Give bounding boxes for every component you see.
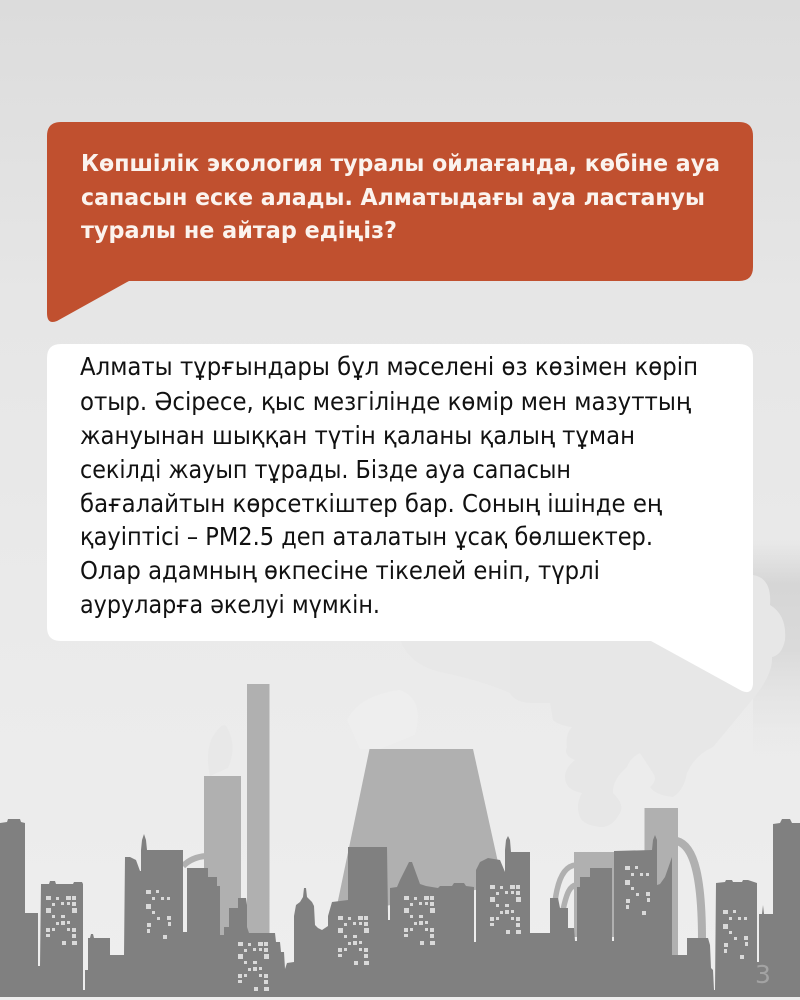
city skyline [0,819,800,997]
left tower [204,776,241,946]
question text: Көпшілік экология туралы ойлағанда, көбіне ауа [81,149,720,177]
cooling tower [335,749,503,915]
answer text: Алматы тұрғындары бұл мәселені өз көзімен көріп [80,352,698,381]
answer text: қауіптісі – РМ2.5 деп аталатын ұсақ бөлшектер. [80,522,653,551]
pipes [183,841,702,940]
answer text: секілді жауып тұрады. Бізде ауа сапасын [80,455,571,484]
tall chimney [247,684,270,939]
panel: question bubble [47,122,753,322]
answer text: жануынан шыққан түтін қаланы қалың тұман [80,421,635,450]
question text: туралы не айтар едіңіз? [81,216,397,244]
answer text: отыр. Әсіресе, қыс мезгілінде көмір мен мазуттың [80,387,692,416]
question text [81,149,720,244]
background chimneys and cooling tower [183,684,702,958]
page number: 3 [755,960,771,989]
answer text: бағалайтын көрсеткіштер бар. Соның ішінде ең [80,489,663,518]
answer text: ауруларға әкелуі мүмкін. [80,590,380,619]
question text: сапасын еске алады. Алматыдағы ауа ластануы [81,183,705,211]
right tower [644,808,678,958]
answer text [80,352,698,619]
right low block [574,852,619,937]
answer text: Олар адамның өкпесіне тікелей еніп, түрлі [80,556,600,585]
windows [46,866,748,991]
smoke clouds [208,575,785,827]
panel: answer bubble [47,344,753,692]
